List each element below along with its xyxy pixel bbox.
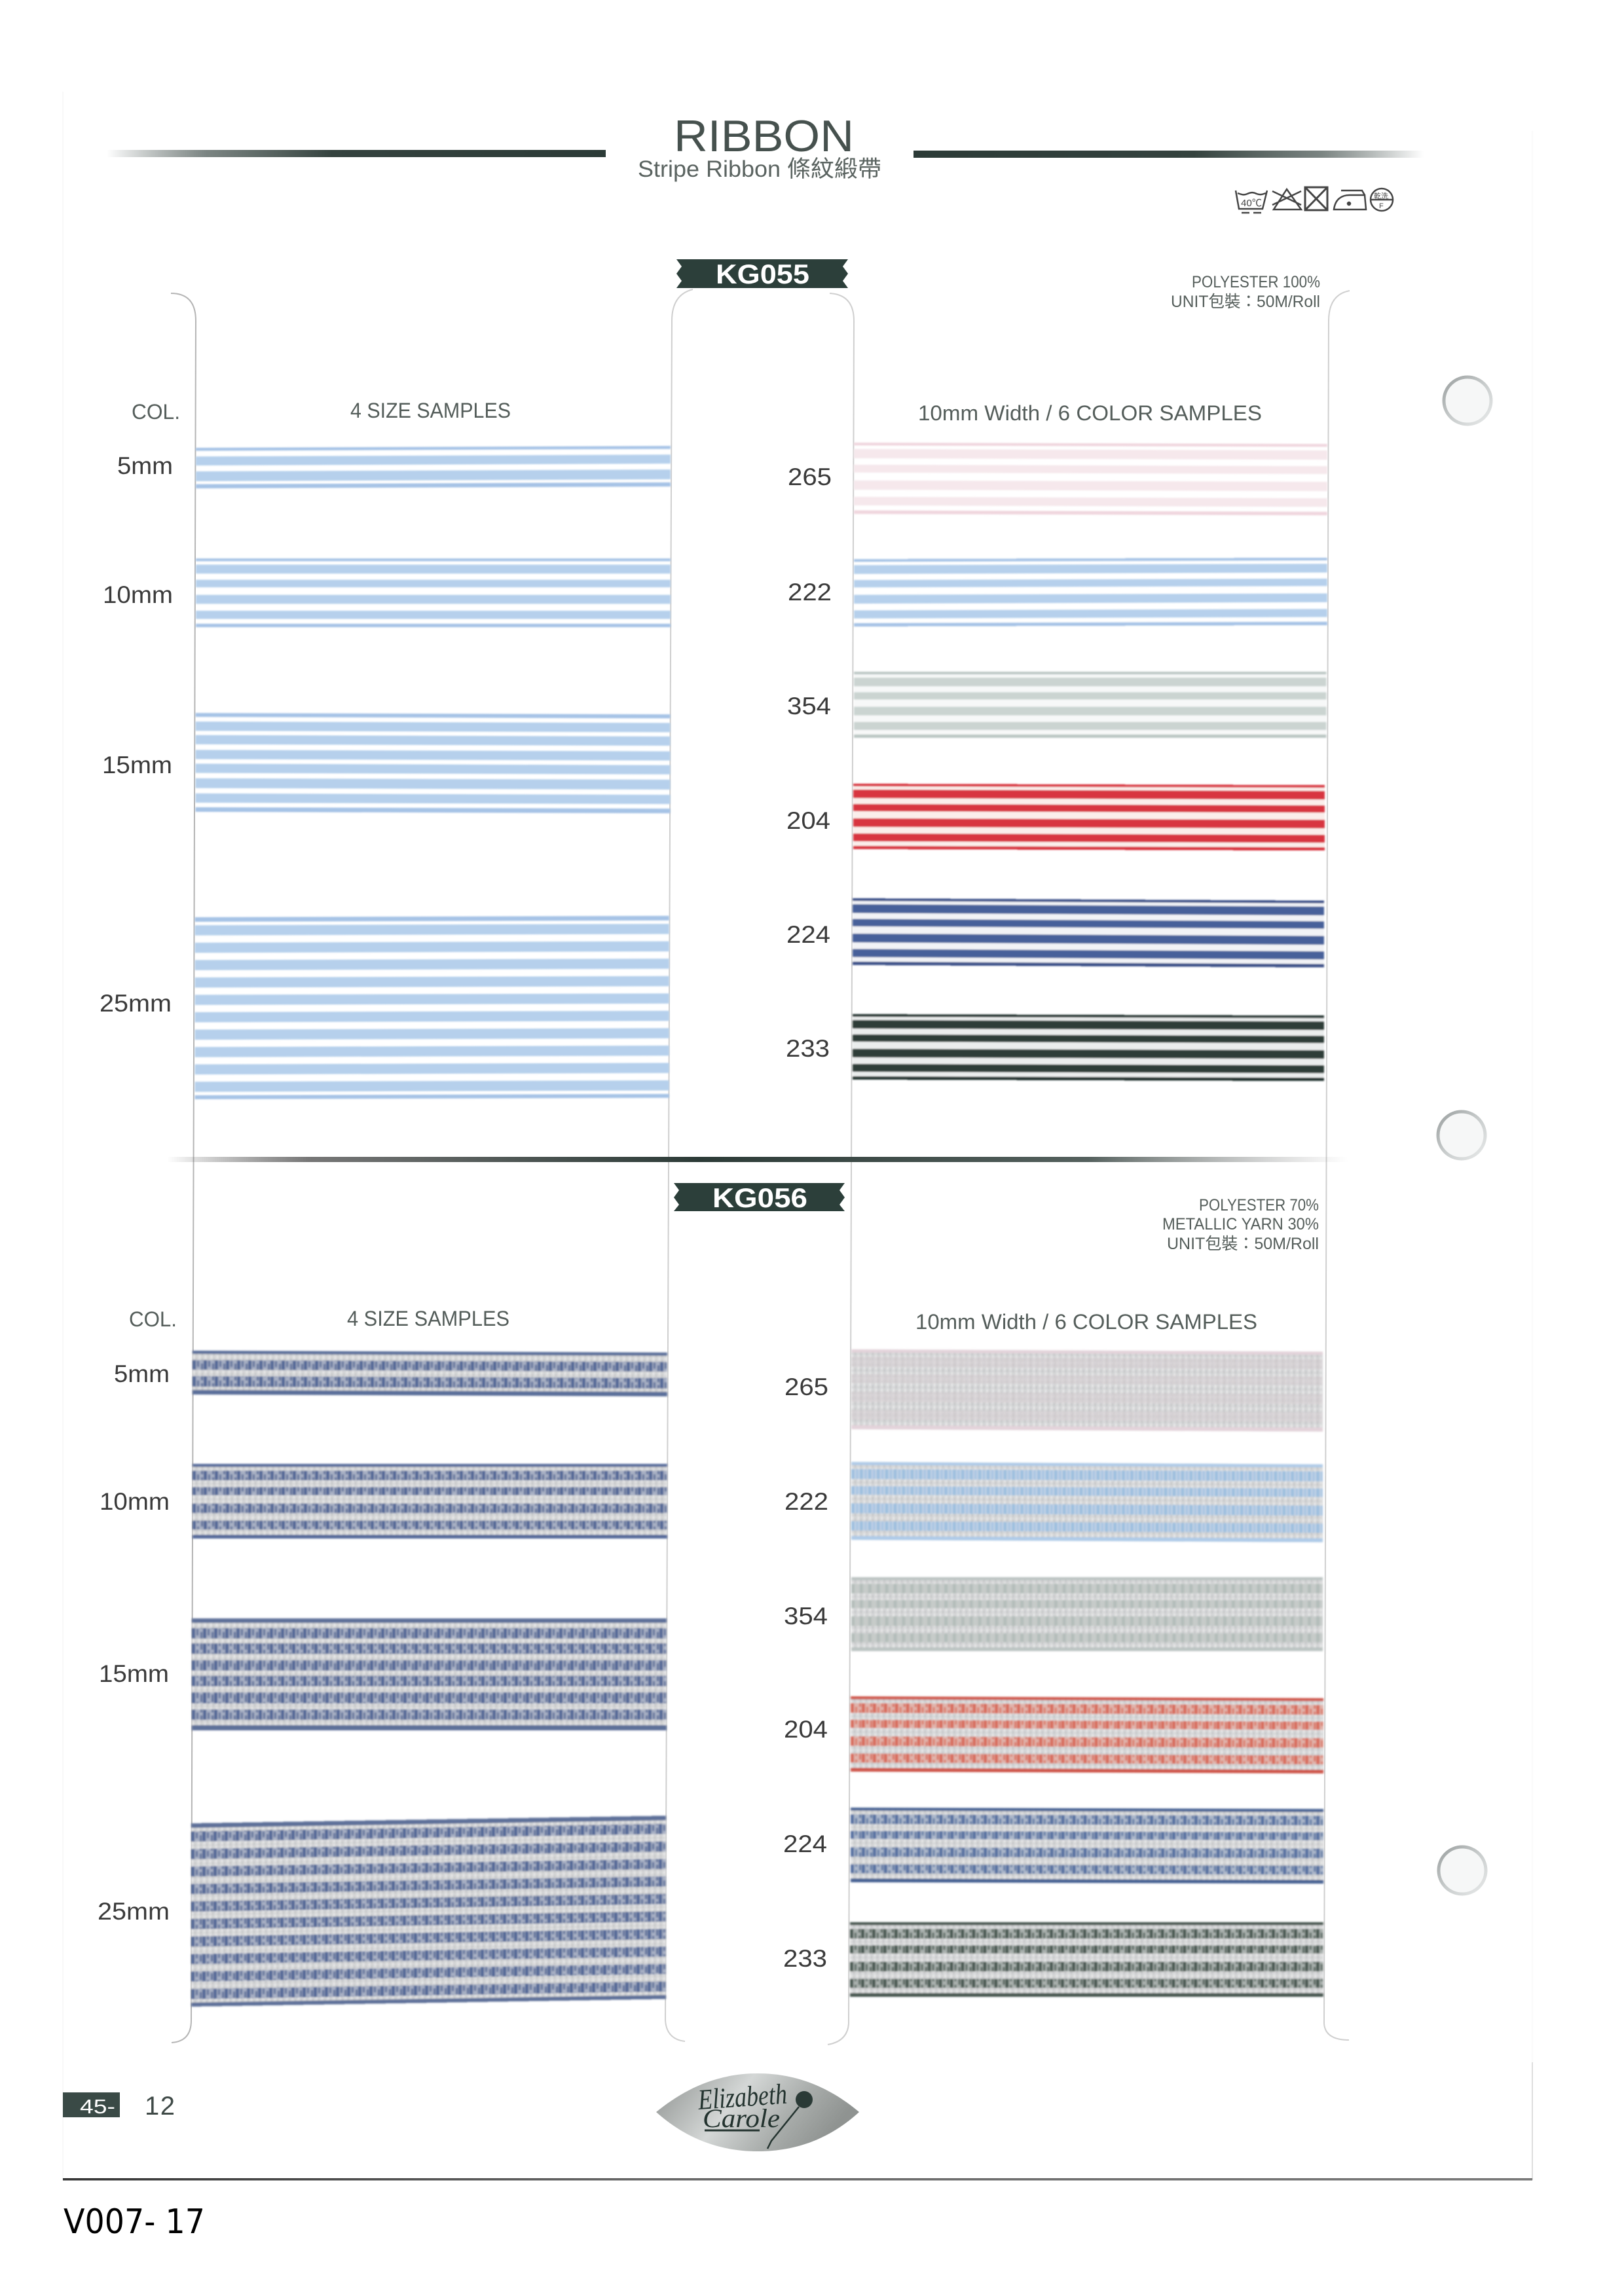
icon: iron [1334, 191, 1366, 210]
color codes KG056: 222 [784, 1488, 828, 1515]
ribbon 354 grey [854, 672, 1326, 738]
material note KG055: POLYESTER 100% [1192, 273, 1320, 291]
care icons [1236, 187, 1393, 213]
logo: Elizabeth Carole: Carole [703, 2104, 780, 2133]
left header KG056 [129, 1307, 1257, 1334]
color codes KG055: 265 [788, 464, 832, 490]
footer rule [63, 2178, 1532, 2180]
left header KG055: 4 SIZE SAMPLES [350, 399, 511, 422]
size labels KG055: 10mm [103, 581, 173, 608]
left header KG056: 10mm Width / 6 COLOR SAMPLES [915, 1310, 1257, 1334]
header: title rule right [913, 151, 1424, 158]
color codes KG055: 222 [788, 579, 832, 606]
ribbon 265 silver pink [851, 1349, 1323, 1432]
ribbon 222 silver blue [851, 1462, 1323, 1542]
color codes KG055: 204 [786, 807, 830, 834]
icon: no bleach [1272, 189, 1301, 210]
material note KG056: POLYESTER 70% [1199, 1196, 1319, 1214]
metallic ribbon samples: four sizes, navy [191, 1351, 667, 2007]
icon: wash 40C: 40℃ [1241, 198, 1262, 209]
size labels KG056 [98, 1360, 170, 1925]
logo: Elizabeth Carole: Elizabeth [696, 2078, 788, 2116]
material note KG055: UNIT包裝：50M/Roll [1171, 293, 1320, 311]
color codes KG056: 354 [784, 1603, 828, 1630]
size labels KG055 [100, 452, 173, 1017]
title: RIBBON: RIBBON [674, 111, 854, 161]
color codes KG056: 224 [783, 1831, 827, 1857]
page number: 12 [145, 2092, 175, 2121]
color codes KG055 [786, 464, 832, 1062]
size labels KG055: 25mm [100, 990, 172, 1017]
color codes KG056: 265 [784, 1374, 828, 1400]
logo: Elizabeth Carole [656, 2073, 859, 2151]
badge: KG055 [676, 259, 848, 289]
column guide lines [171, 289, 1350, 2045]
ribbon 224 silver navy [851, 1808, 1323, 1884]
color codes KG055: 224 [786, 921, 830, 948]
catalog code: V007- 17 [64, 2202, 205, 2242]
section divider [167, 1157, 1348, 1162]
badge: KG056 [674, 1182, 845, 1213]
page number [63, 2092, 175, 2121]
ribbon 265 pink [854, 443, 1327, 515]
ribbon 224 navy [853, 898, 1324, 968]
ribbon 233 black [853, 1014, 1324, 1081]
ribbon 5mm [193, 1351, 667, 1396]
page number: 45- [80, 2095, 115, 2118]
material note KG055 [1171, 273, 1320, 311]
color codes KG056 [783, 1374, 828, 1972]
size labels KG056: 25mm [98, 1898, 170, 1925]
size labels KG056: 15mm [99, 1660, 169, 1687]
icon: wash 40C [1236, 191, 1267, 213]
subtitle: Stripe Ribbon 條紋緞帶 [638, 156, 881, 182]
color codes KG055: 354 [787, 693, 831, 720]
left header KG056: 4 SIZE SAMPLES [347, 1307, 509, 1330]
material note KG056 [1162, 1196, 1319, 1253]
ribbon 204 red [853, 784, 1325, 850]
size labels KG056: 5mm [114, 1360, 170, 1387]
icon: dry clean: 乾洗 [1374, 192, 1388, 200]
ribbon samples: six colors [853, 443, 1327, 1081]
binder hole 3 [1439, 1847, 1486, 1894]
badge: KG056: KG056 [712, 1182, 807, 1213]
binder hole 2 [1438, 1112, 1485, 1159]
left header KG055 [132, 399, 1262, 425]
panel: KG055 [100, 259, 1327, 1099]
metallic ribbon samples: six colors [850, 1349, 1323, 1997]
icon: do not tumble dry [1305, 187, 1327, 210]
ribbon 204 silver red [851, 1696, 1323, 1774]
size labels KG056: 10mm [100, 1488, 170, 1515]
ribbon samples: four sizes, light blue [195, 446, 671, 1099]
binder hole 1 [1444, 377, 1491, 424]
size labels KG055: 5mm [117, 452, 173, 479]
badge: KG055: KG055 [716, 259, 809, 289]
size labels KG055: 15mm [102, 752, 172, 778]
material note KG056: UNIT包裝：50M/Roll [1167, 1235, 1319, 1253]
ribbon 10mm [193, 1464, 667, 1539]
color codes KG055: 233 [786, 1035, 830, 1062]
ribbon 354 silver grey [851, 1577, 1323, 1651]
left header KG055: 10mm Width / 6 COLOR SAMPLES [918, 401, 1262, 425]
material note KG056: METALLIC YARN 30% [1162, 1215, 1319, 1233]
ribbon 233 silver black [850, 1922, 1323, 1997]
header: title rule left [107, 150, 606, 157]
icon: dry clean: F [1379, 202, 1384, 210]
left header KG055: COL. [132, 400, 180, 424]
ribbon 25mm [191, 1815, 666, 2007]
color codes KG056: 233 [783, 1945, 827, 1972]
ribbon 222 blue [854, 558, 1327, 627]
color codes KG056: 204 [784, 1716, 828, 1743]
ribbon 15mm [192, 1618, 667, 1730]
panel: KG056 [98, 1182, 1323, 2007]
left header KG056: COL. [129, 1307, 177, 1331]
icon: dry clean [1371, 189, 1393, 211]
